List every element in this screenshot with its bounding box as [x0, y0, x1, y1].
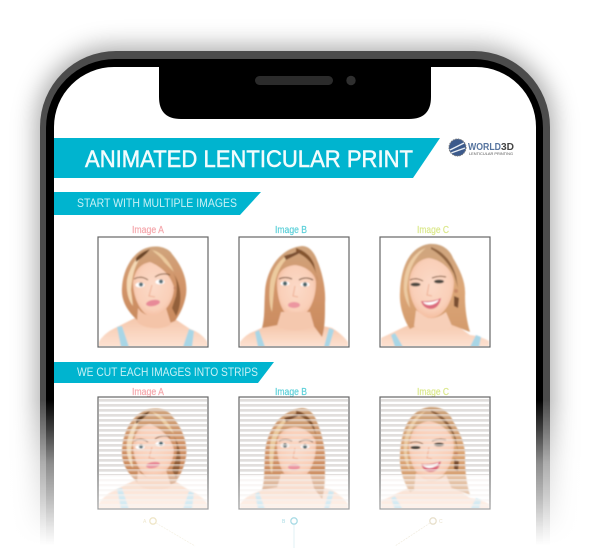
- speaker: [255, 76, 333, 85]
- section banner: we cut each images into strips: WE CUT EACH IMAGES INTO STRIPS: [77, 365, 258, 379]
- connector C: C: [439, 519, 443, 525]
- strips C: [380, 397, 490, 510]
- logo: World3D: [449, 139, 514, 156]
- connector B: [282, 518, 297, 548]
- left bezel fade: [0, 400, 54, 558]
- connector A: A: [143, 519, 147, 525]
- logo: World3D: LENTICULAR PRINTING: [469, 152, 513, 156]
- section banner: we cut each images into strips: [54, 362, 274, 383]
- photo B: [239, 237, 349, 347]
- label: image B: Image B: [275, 225, 307, 236]
- label: strips image A: Image A: [132, 387, 164, 398]
- strips A: [98, 397, 208, 509]
- title banner: [54, 138, 440, 178]
- right bezel fade: [536, 400, 600, 558]
- section banner: start with multiple images: START WITH MULTIPLE IMAGES: [77, 196, 237, 210]
- notch: [159, 60, 431, 119]
- phone body: [40, 51, 550, 558]
- strips bottom fade: [90, 470, 500, 512]
- section banner: start with multiple images: [54, 192, 261, 215]
- connector A: [143, 518, 195, 546]
- logo: World3D: 3D: [501, 142, 514, 153]
- label: image A: Image A: [132, 225, 164, 236]
- phone drop shadow: [36, 46, 554, 545]
- photo A: [98, 237, 208, 347]
- label: image C: Image C: [417, 225, 449, 236]
- logo: World3D: WORLD: [468, 142, 501, 153]
- connector B: B: [282, 519, 286, 525]
- label: strips image C: Image C: [417, 387, 449, 398]
- title: ANIMATED LENTICULAR PRINT: [85, 146, 413, 173]
- strips B: [239, 397, 349, 509]
- label: strips image B: Image B: [275, 387, 307, 398]
- camera: [346, 76, 356, 85]
- connector C: [395, 518, 443, 546]
- photo C: [380, 237, 490, 347]
